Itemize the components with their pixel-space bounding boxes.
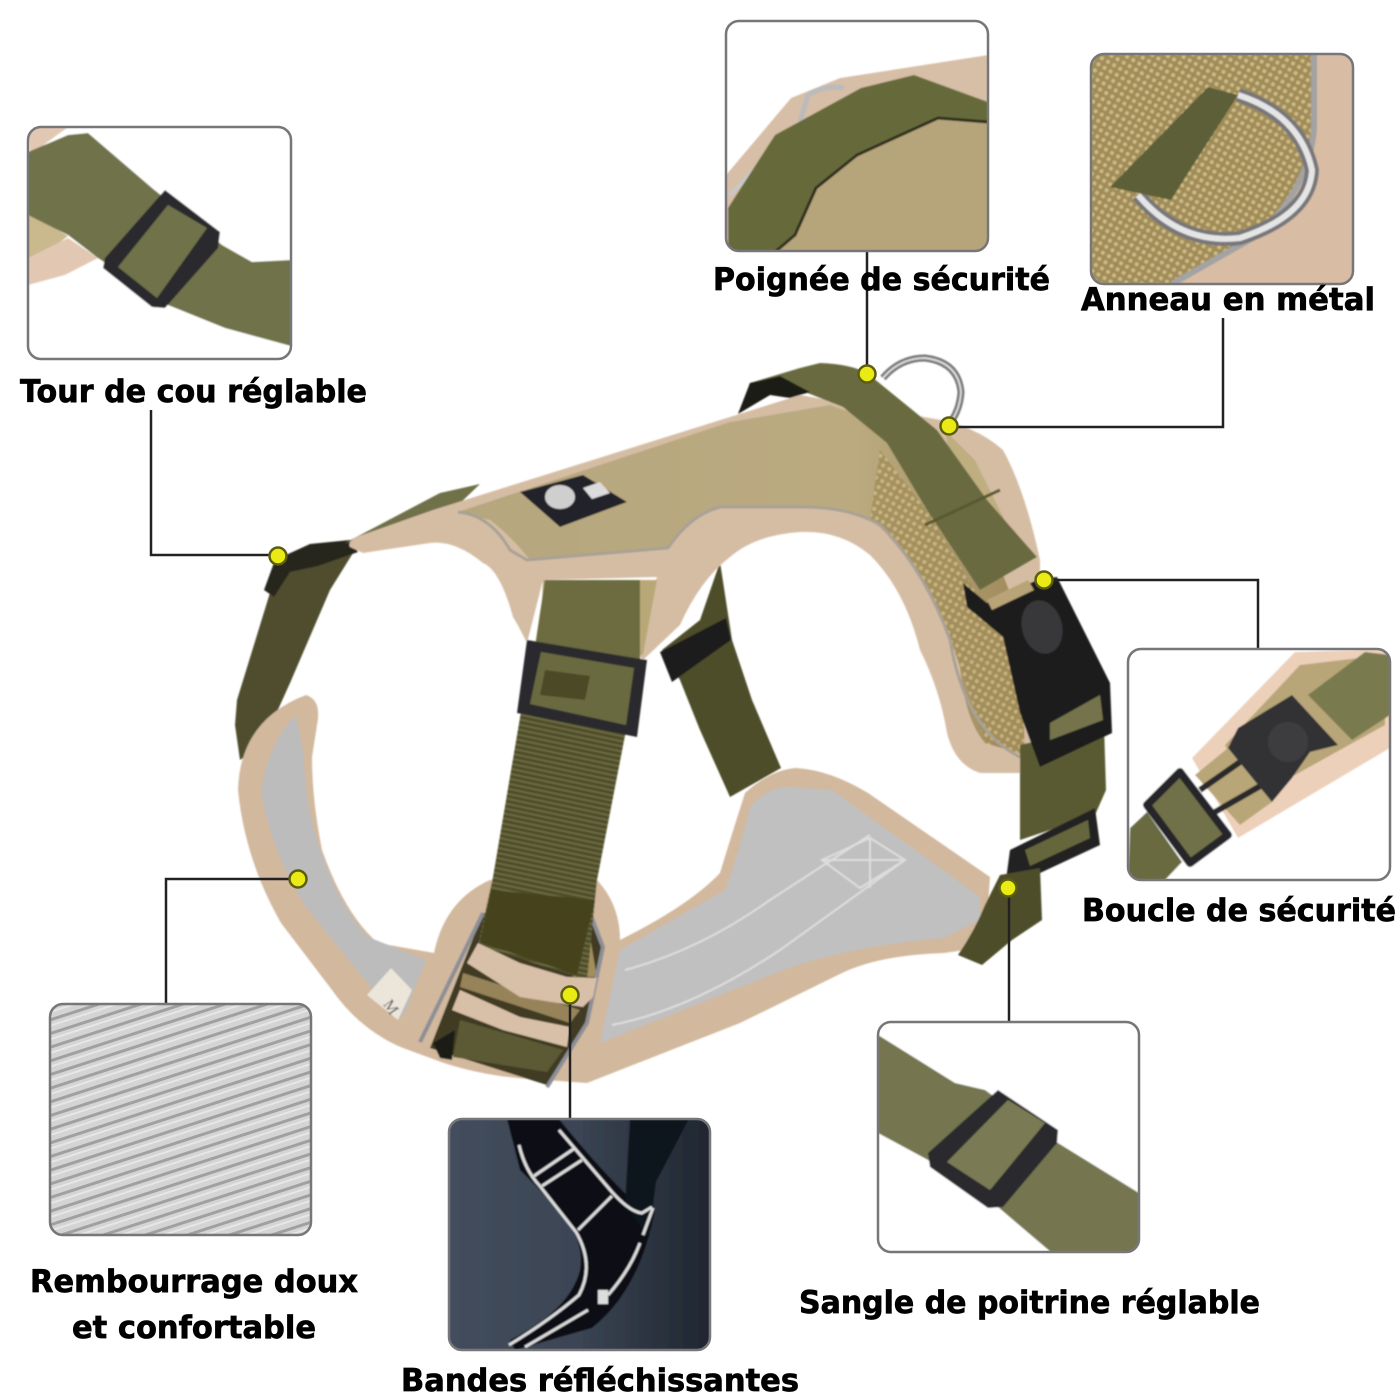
back chest strap [662,562,781,797]
peach padded body [349,395,1040,773]
lower strap end [958,868,1042,965]
label: padding [30,1264,358,1346]
dark shaded strap [480,890,595,975]
gray reflective edge [458,507,1020,757]
peach chest pad [238,695,990,1083]
inset: safety handle [727,54,987,250]
pad stitching [612,835,905,1025]
lower slider [1006,808,1100,880]
inset: padding texture [50,1004,311,1235]
back strap keeper [660,618,731,682]
gray lining right [600,787,980,1043]
inset frame: metal ring [1091,54,1353,284]
strap mesh pocket under front [540,580,657,655]
main harness illustration [235,358,1112,1087]
mesh strip right of handle [945,430,1012,535]
label: padding: et confortable [72,1310,316,1346]
chest strap upper [533,580,640,660]
label: buckle: Boucle de sécurité [1082,893,1396,929]
gray lining left [261,715,426,1017]
mesh texture near buckle [870,450,1025,755]
label: handle: Poignée de sécurité [713,262,1050,298]
size label [367,968,412,1020]
logo tag [520,475,627,527]
inset frame: padding texture [50,1004,311,1235]
metal ring behind handle [883,358,961,420]
leader lines [151,252,1258,1119]
label: padding: Rembourrage doux [30,1264,358,1300]
inset frame: reflective strips [449,1119,710,1350]
label: chest strap: Sangle de poitrine réglable [799,1285,1260,1321]
olive shoulder edge [345,484,480,543]
inset frame: safety handle [726,21,988,251]
inset: metal ring [1091,54,1353,284]
center slider [517,640,647,737]
chest strap lower [478,700,628,980]
label: ring: Anneau en métal [1081,282,1375,318]
size label: M [379,997,402,1018]
neck strap slider [264,540,358,597]
label: reflective: Bandes réfléchissantes [401,1363,799,1399]
left neck strap [235,550,353,760]
label: neck: Tour de cou réglable [20,374,367,410]
tan mesh panel [458,405,1025,755]
peach loop bands [452,943,597,1047]
lower body strap [1020,725,1106,840]
marker dots [270,366,1052,1004]
inset frame: safety buckle [1128,649,1390,880]
side release buckle [963,577,1112,767]
inset: chest strap [878,1022,1139,1253]
inset: neck adjuster [28,127,291,359]
center loop [420,913,603,1087]
inset: reflective strips [449,1119,710,1350]
inset frame: chest strap [878,1022,1139,1252]
inset: safety buckle [1128,649,1390,880]
inset frame: neck adjuster [28,127,291,359]
handle strap [738,363,1037,590]
